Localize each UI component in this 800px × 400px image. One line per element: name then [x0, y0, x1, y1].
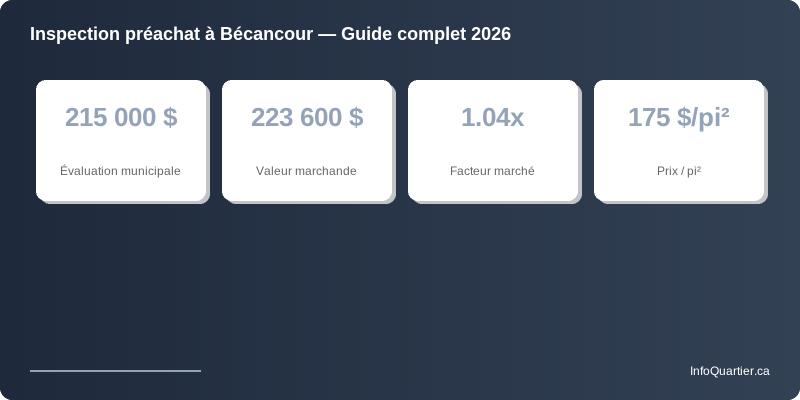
label: Facteur marché: Facteur marché: [450, 164, 535, 178]
value: 175 $/pi²: 175 $/pi²: [628, 102, 730, 132]
label: Valeur marchande: Valeur marchande: [256, 164, 357, 178]
label: Prix / pi²: Prix / pi²: [657, 164, 701, 178]
value: 1.04x: 1.04x: [461, 102, 525, 132]
panel: Prix / pi²: [594, 80, 768, 204]
panel: Valeur marchande: [222, 80, 396, 204]
title: Inspection préachat à Bécancour — Guide complet 2026: [30, 24, 511, 44]
value: 215 000 $: 215 000 $: [65, 102, 178, 132]
value: 223 600 $: 223 600 $: [251, 102, 364, 132]
footer source: InfoQuartier.ca: [690, 364, 770, 378]
footer accent line: [30, 370, 201, 372]
panel: Évaluation municipale: [36, 80, 210, 204]
label: Évaluation municipale: Évaluation municipale: [60, 163, 181, 178]
panel: Facteur marché: [408, 80, 582, 204]
